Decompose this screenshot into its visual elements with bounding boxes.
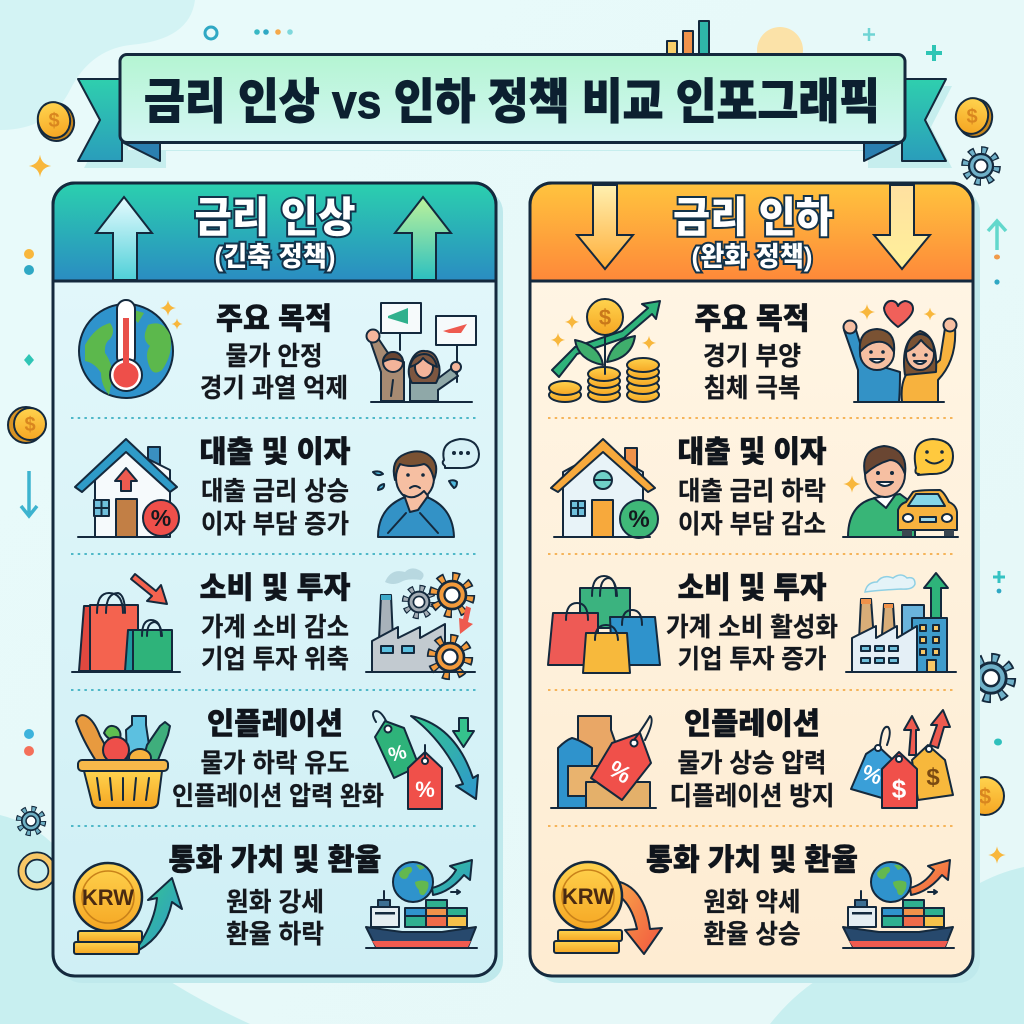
icon: grocery basket: [76, 715, 170, 808]
icon: house percent: [551, 439, 658, 538]
icon: gear top right: [966, 151, 996, 181]
row: loans and interest: [75, 436, 479, 539]
arrow down right: [874, 185, 930, 269]
icon: coin top left: [34, 98, 78, 145]
ribbon tail right: [864, 79, 946, 161]
text line: 원화 약세: [704, 887, 800, 917]
decorative sun: [757, 27, 803, 73]
header: [53, 183, 496, 281]
icon: gear right: [972, 659, 1010, 697]
row: currency and exchange: [554, 844, 954, 954]
icon: goods and price tag: [551, 716, 656, 808]
row: loans and interest: [551, 436, 958, 539]
outer decorations right: [952, 94, 1010, 864]
heading: 인플레이션: [207, 708, 343, 741]
text line: 물가 안정: [226, 341, 322, 371]
accent dots: [24, 249, 34, 275]
small plus: [993, 571, 1005, 593]
icon: tags rising: $: [892, 774, 907, 804]
icon: coin left: [8, 407, 46, 443]
icon: goods and price tag: %: [604, 755, 636, 789]
dividers: [71, 418, 478, 826]
text line: 가계 소비 활성화: [666, 612, 838, 642]
icon: happy people: [844, 301, 956, 402]
text line: 인플레이션 압력 완화: [172, 781, 384, 811]
ribbon tail left: [78, 79, 160, 161]
dot: [994, 738, 1002, 746]
decorative plus signs: [863, 28, 942, 61]
icon: tags rising: %: [859, 759, 886, 790]
text line: 침체 극복: [704, 373, 800, 403]
panel shadow: [537, 190, 980, 983]
icon: coin plant growth: [549, 299, 660, 402]
arrow up left: [96, 197, 152, 280]
decorative bar chart: [667, 21, 709, 55]
text line: 환율 상승: [704, 919, 800, 949]
heading: 소비 및 투자: [200, 572, 351, 605]
icon: cargo ship globe: [366, 860, 477, 948]
header subtitle: (완화 정책): [692, 242, 812, 272]
arrow down left: [577, 185, 633, 269]
heading: 주요 목적: [694, 303, 810, 336]
icon: shopping bags down: [72, 574, 180, 672]
heading: 통화 가치 및 환율: [646, 844, 858, 877]
icon: price tags down: %: [386, 741, 409, 767]
header title: 금리 인하: [673, 194, 833, 241]
text line: 기업 투자 증가: [678, 644, 827, 674]
icon: growing factory: [846, 573, 956, 672]
icon: house up: %: [151, 505, 171, 531]
text line: 물가 하락 유도: [200, 748, 350, 778]
header: [530, 183, 973, 281]
text line: 디플레이션 방지: [670, 781, 834, 811]
text line: 경기 부양: [703, 341, 801, 371]
title banner: [78, 54, 952, 168]
icon: sparkle right: [988, 846, 1006, 864]
icon: tags rising: $: [926, 764, 940, 791]
icon: coin plant growth: $: [599, 305, 611, 330]
heading: 소비 및 투자: [678, 572, 827, 605]
decorative ring and dots: [205, 27, 293, 39]
arrow up: [988, 221, 1006, 250]
banner shadow: [84, 86, 952, 168]
panel: rate cut: [530, 183, 980, 983]
heading: 대출 및 이자: [200, 436, 351, 469]
dividers: [548, 418, 955, 826]
icon: KRW coin down: [554, 862, 662, 954]
icon: globe thermometer: [79, 300, 183, 398]
outer decorations left: [8, 98, 78, 886]
row: main goal: [79, 300, 476, 403]
icon: coin right: $: [979, 784, 991, 809]
accent dots upper: [994, 254, 1000, 285]
icon: gear small: [20, 810, 42, 832]
icon: protesters: [366, 303, 476, 402]
text line: 원화 강세: [226, 887, 324, 917]
header subtitle: (긴축 정책): [214, 242, 336, 272]
orange ring: [22, 856, 52, 886]
row: currency and exchange: [74, 844, 477, 954]
icon: price tags down: %: [415, 777, 435, 802]
icon: cargo ship globe: [843, 860, 954, 948]
heading: 통화 가치 및 환율: [168, 844, 382, 877]
icon: coin top right: [952, 94, 996, 141]
icon: sparkle: [29, 155, 51, 177]
title: 금리 인상 vs 인하 정책 비교 인포그래픽: [144, 76, 880, 129]
panel body: [53, 183, 496, 976]
icon: coin top right: $: [966, 106, 978, 128]
banner box: [120, 54, 905, 142]
text line: 이자 부담 증가: [201, 509, 349, 539]
icon: coin right: [966, 777, 1004, 815]
icon: tags rising: [851, 710, 953, 808]
icon: shopping bags up: [548, 576, 660, 673]
text line: 물가 상승 압력: [678, 748, 826, 778]
heading: 인플레이션: [684, 708, 820, 741]
panel: rate hike: [53, 183, 503, 983]
row: spending and investment: [548, 572, 956, 674]
text line: 경기 과열 억제: [200, 373, 348, 403]
text line: 가계 소비 감소: [201, 612, 349, 642]
icon: house percent: %: [628, 506, 650, 533]
orange ring fill: [22, 856, 52, 886]
heading: 대출 및 이자: [678, 436, 827, 469]
icon: price tags down: [373, 711, 478, 809]
row: inflation: [76, 708, 478, 811]
arrow up right: [395, 197, 451, 280]
icon: worried person: [373, 439, 479, 537]
panel body: [530, 183, 973, 976]
row: spending and investment: [72, 568, 475, 674]
text line: 환율 하락: [226, 919, 324, 949]
icon: house up: [75, 439, 179, 537]
text line: 기업 투자 위축: [201, 644, 349, 674]
text line: 대출 금리 상승: [201, 476, 349, 506]
accent dots lower: [24, 729, 34, 756]
header title: 금리 인상: [194, 194, 356, 241]
row: main goal: [549, 299, 956, 403]
icon: KRW coin up: [74, 863, 182, 954]
text line: 이자 부담 감소: [678, 509, 826, 539]
icon: happy person and car: [843, 439, 958, 537]
icon: coin left: $: [24, 414, 36, 436]
icon: coin top left: $: [48, 110, 60, 132]
heading: 주요 목적: [216, 303, 332, 336]
panel shadow: [60, 190, 503, 983]
arrow down: [21, 471, 37, 516]
text line: 대출 금리 하락: [678, 476, 826, 506]
small diamond: [24, 354, 34, 366]
icon: factory gears: [366, 568, 475, 674]
row: inflation: [551, 708, 953, 811]
